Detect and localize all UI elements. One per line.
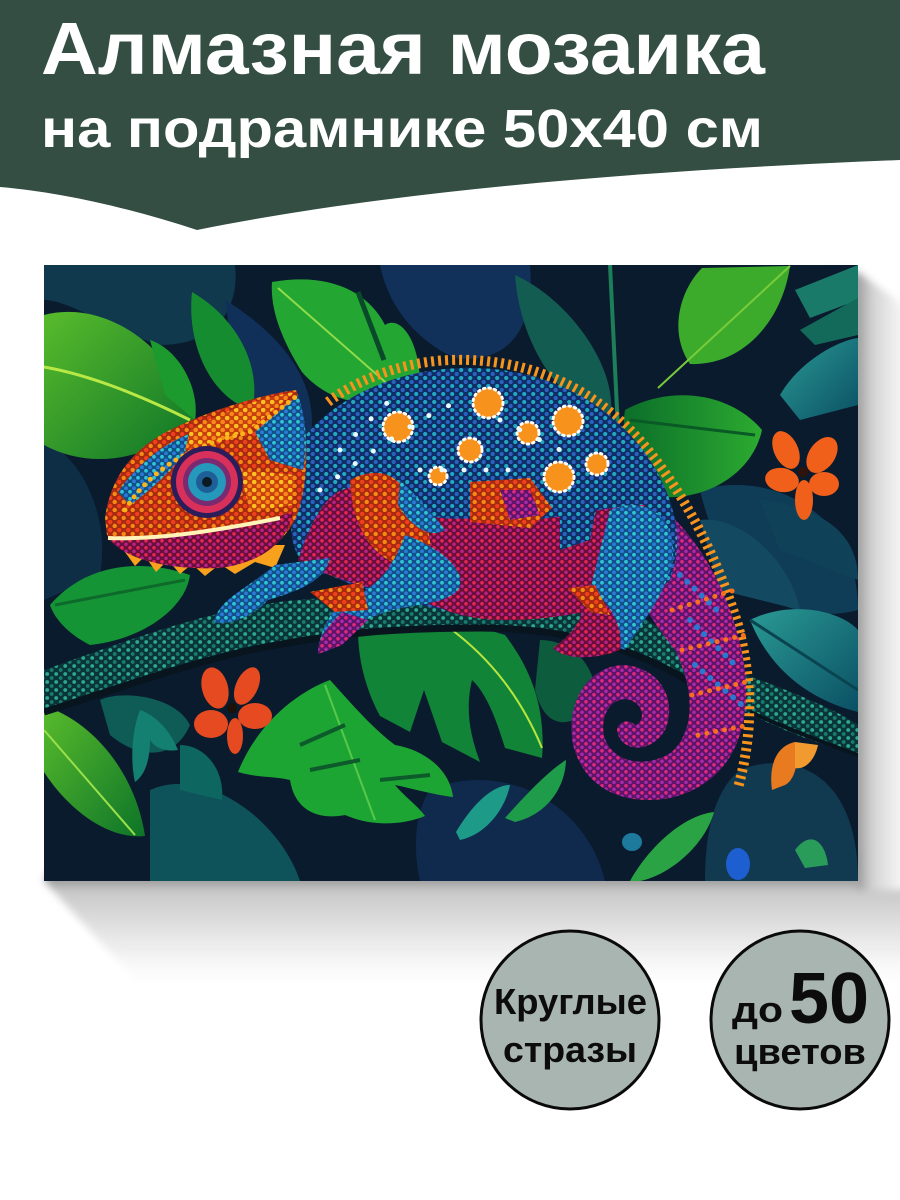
badge: up to 50 colours: цветов [734,1031,866,1072]
branch [44,588,858,755]
canvas drop shadow [44,272,900,985]
badge: round rhinestones: стразы [503,1029,637,1070]
leaf: top left large green [44,292,254,459]
painting: chameleon on a branch [44,265,858,881]
chameleon [105,360,749,800]
title [41,7,766,159]
chameleon eye [171,446,243,518]
leaves: small teal and green sprigs [132,710,828,881]
badge: up to 50 colours: до [732,989,783,1030]
chameleon rear leg [590,505,673,650]
chameleon near arm [214,558,330,623]
leaf: left lower green [50,566,190,645]
flower: lower left red-orange [194,663,272,754]
flower: bottom right bud [771,742,818,790]
chameleon white dots [320,390,560,490]
leaf: top right green [658,265,858,420]
badge: round rhinestones: Круглые [494,981,647,1022]
leaf: lower monstera [238,680,453,823]
leaf: top centre monstera [272,279,420,402]
chameleon head [105,390,306,568]
header banner [0,0,900,230]
chameleon tail [572,490,746,800]
leaf: centre monstera vertical [358,623,543,762]
badge: round rhinestones [481,931,659,1109]
badge: up to 50 colours [711,931,889,1109]
background dark foliage [44,265,858,881]
leaf: bottom left green [44,706,145,836]
leaf: right teal [750,609,858,712]
subtitle: на подрамнике 50x40 см [41,99,763,159]
leaf: right green [624,395,762,497]
chameleon body spots [383,388,608,492]
flower: right orange [765,431,839,520]
chameleon spines [328,360,749,788]
badge: up to 50 colours: 50 [789,959,869,1039]
title: Алмазная мозаика [41,7,766,90]
chameleon body [291,368,677,615]
chameleon front leg [318,535,460,652]
